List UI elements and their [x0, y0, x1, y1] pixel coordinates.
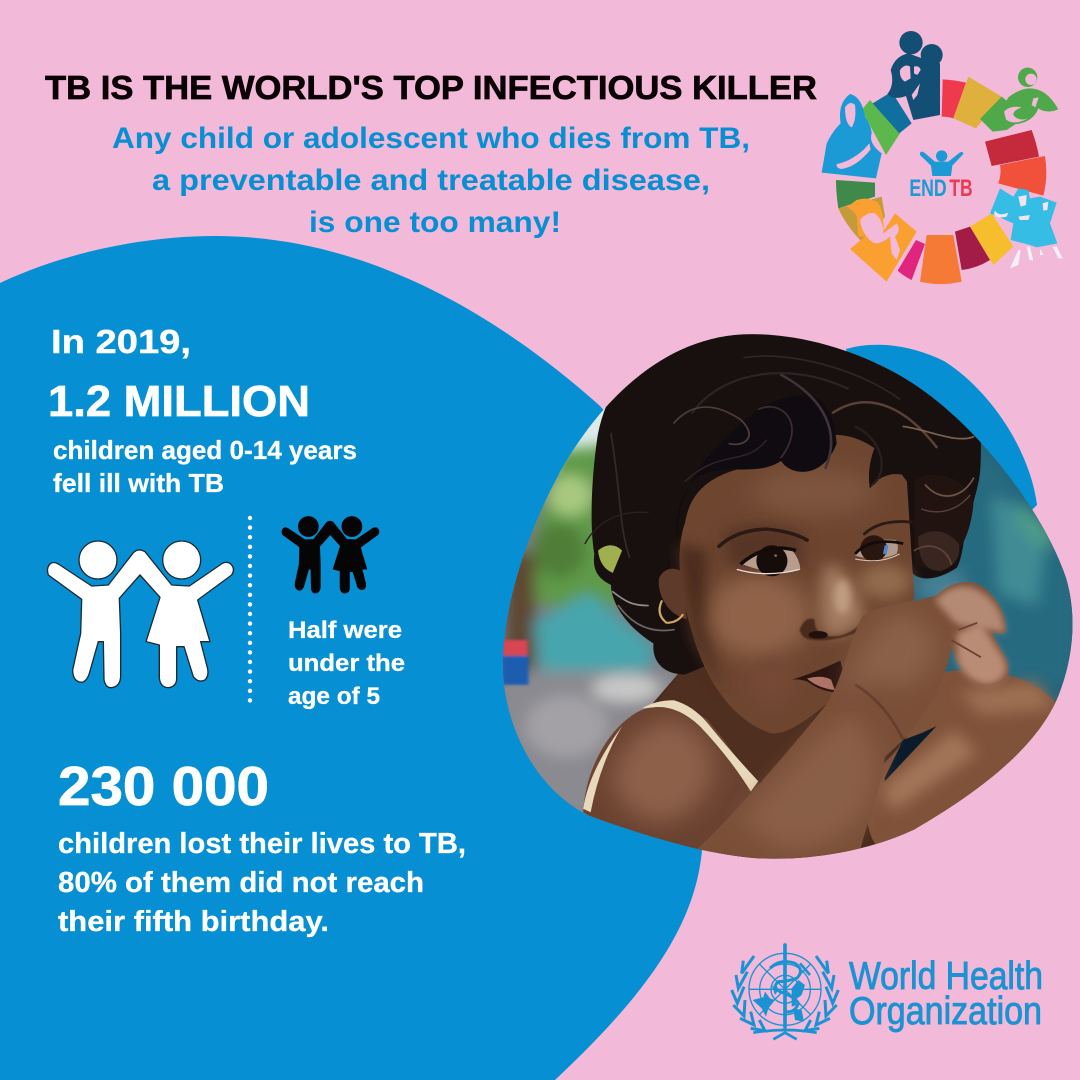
text: children lost their lives: their fifth birthday.	[58, 906, 329, 938]
END TB text: END	[909, 175, 947, 202]
logo: WHO wordmark: World Health	[849, 955, 1043, 998]
logo: WHO emblem	[732, 945, 838, 1039]
wreath	[732, 956, 838, 1039]
near arm and hand	[696, 582, 1008, 860]
stat: in 2019: In 2019,	[51, 323, 191, 360]
subtitle: is one too many!	[309, 206, 561, 239]
text: children lost their lives	[58, 828, 466, 938]
hair strands	[585, 356, 974, 631]
continents	[753, 980, 805, 1022]
stat: in 2019	[48, 323, 310, 426]
logo: WHO wordmark: Organization	[849, 990, 1042, 1033]
chest base	[648, 657, 907, 860]
text: children fell ill	[53, 435, 357, 498]
photo background	[500, 330, 1077, 860]
centre person	[920, 150, 963, 176]
subtitle: a preventable and treatable disease,	[152, 164, 710, 197]
staff and snake	[779, 945, 790, 1027]
logo: End TB ring	[822, 31, 1063, 284]
shoulder	[583, 706, 766, 860]
arm light areas	[740, 586, 1006, 850]
figure: girl coughing	[847, 199, 917, 282]
text: half under age 5: Half were	[288, 617, 402, 644]
text: half under age 5: age of 5	[288, 683, 380, 710]
title: TB IS THE WORLD'S TOP INFECTIOUS KILLER	[45, 69, 817, 106]
text: children fell ill: children aged 0-14 years	[53, 435, 357, 465]
hair back	[592, 323, 981, 674]
icon: two children black	[282, 516, 379, 593]
END TB text: TB	[949, 175, 973, 202]
photo of child	[500, 323, 1077, 860]
earring	[660, 600, 683, 623]
face shading	[678, 468, 911, 705]
figure: pregnant woman	[822, 94, 882, 178]
far arm	[867, 670, 1059, 847]
icon: two children white	[47, 541, 233, 688]
vest strap	[583, 700, 758, 812]
nose	[799, 618, 858, 641]
hair front	[676, 395, 974, 571]
stat: 1.2 million: 1.2 MILLION	[48, 377, 310, 426]
text: children fell ill: fell ill with TB	[53, 468, 224, 498]
blue background shape left	[0, 236, 704, 1080]
figure: running children	[990, 188, 1063, 268]
subtitle	[112, 122, 750, 239]
stat: 230 000: 230 000	[58, 755, 269, 817]
text: half under age 5: under the	[288, 650, 405, 677]
green gaps in hair	[598, 545, 622, 573]
blue accent shape behind photo	[846, 345, 1037, 560]
subtitle: Any child or adolescent who dies from TB,	[112, 122, 750, 155]
ear	[659, 569, 687, 619]
globe	[749, 953, 821, 1025]
logo: WHO wordmark	[849, 955, 1043, 1033]
ring segments	[836, 77, 1046, 284]
text: children lost their lives: 80% of them did not reach	[58, 867, 424, 899]
eyebrows	[719, 522, 911, 546]
figure: woman with green scarf	[1000, 68, 1058, 124]
text: children lost their lives: children lost their lives to TB,	[58, 828, 466, 860]
eyes	[737, 535, 903, 576]
face	[679, 435, 914, 733]
figure: family	[887, 31, 943, 120]
neck	[724, 740, 758, 784]
mouth	[792, 660, 842, 692]
text: half under age 5	[288, 617, 405, 710]
